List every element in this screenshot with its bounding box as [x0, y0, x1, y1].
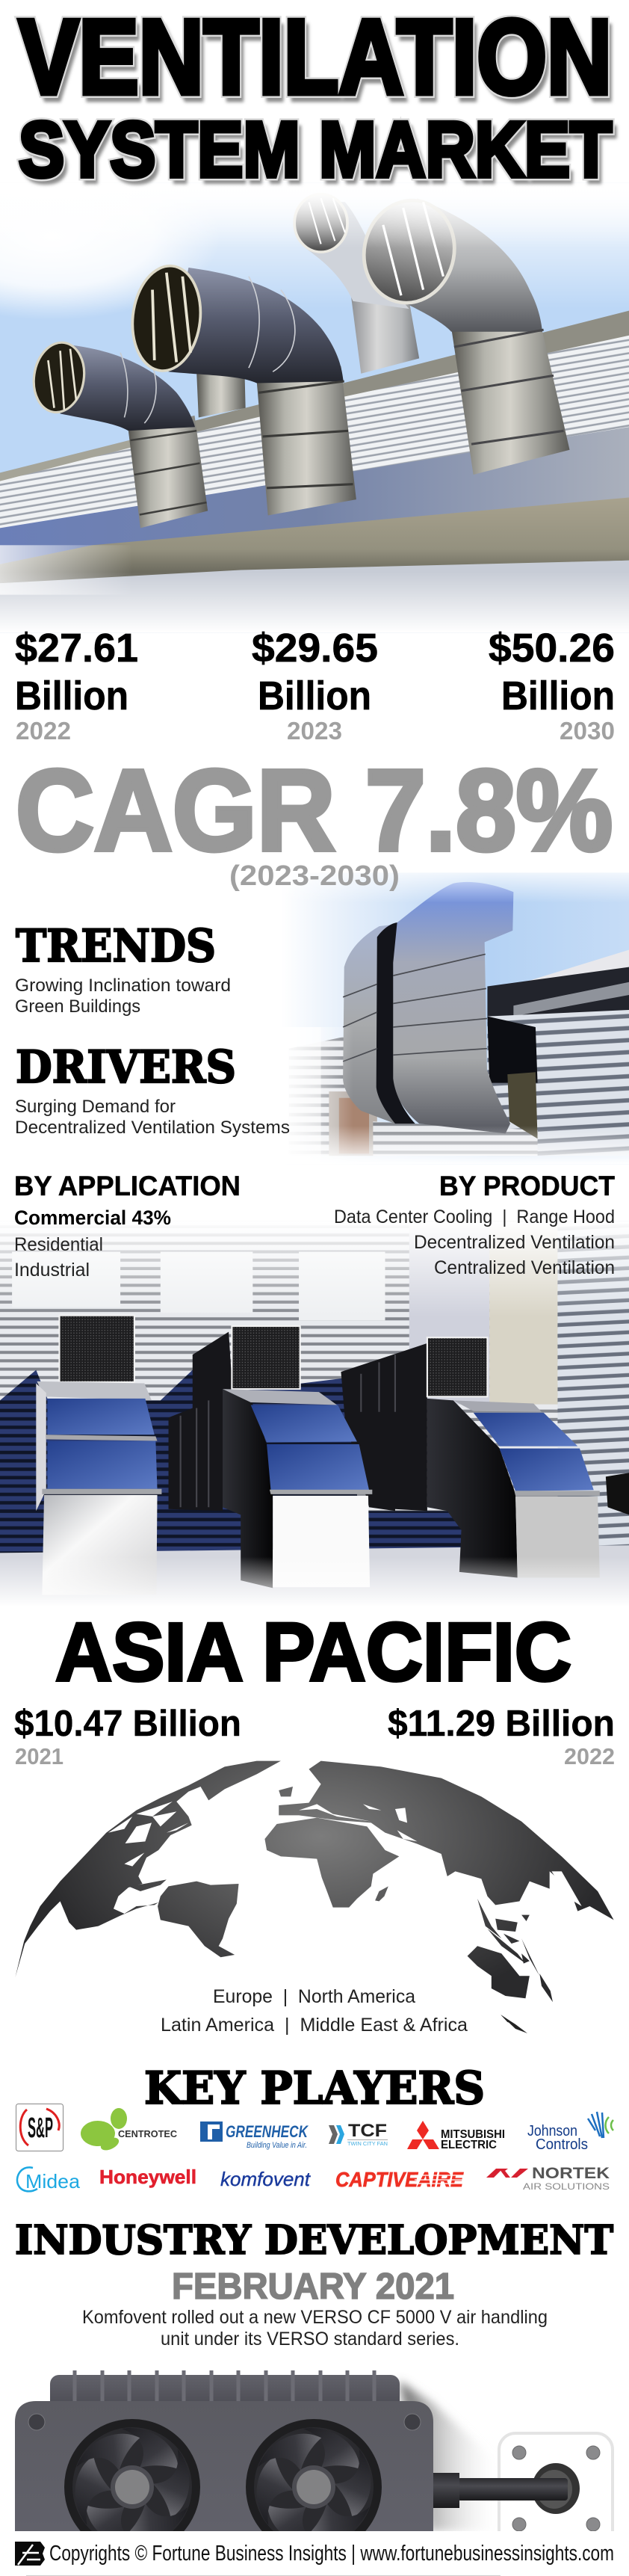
logo: Centrotec: CENTROTEC: [118, 2128, 178, 2139]
logo: TCF: TWIN CITY FAN: [347, 2142, 388, 2147]
logo: Johnson Controls: [527, 2112, 613, 2153]
duct: pale rear: [196, 194, 419, 417]
segment: by product: BY PRODUCT: [439, 1171, 615, 1201]
stat: 2022 market size: [15, 626, 138, 745]
map: Southeast Asia islands: [477, 1899, 553, 2002]
duct: middle large: [127, 262, 356, 516]
trends text: [15, 976, 231, 1017]
stat: 2023 market size: [252, 626, 378, 745]
logo: Greenheck: Building Value in Air.: [247, 2141, 307, 2150]
map: South America: [158, 1882, 239, 1957]
illustration: air handling unit with fans: [15, 2370, 614, 2531]
stat: 2030 market size: 2030: [560, 717, 615, 745]
logo: Johnson Controls: Johnson: [527, 2123, 577, 2139]
logo: Greenheck: GREENHECK: [226, 2122, 309, 2141]
fan left: [64, 2419, 200, 2531]
key players heading: KEY PLAYERS: [144, 2062, 485, 2115]
map: Eurasia: [279, 1761, 614, 1920]
unit shadow: [398, 2377, 478, 2531]
mounting plate: [498, 2432, 614, 2531]
logo: Mitsubishi Electric: MITSUBISHI: [441, 2128, 505, 2141]
stat: 2023 market size: Billion: [258, 674, 371, 718]
logo: Centrotec: [81, 2108, 178, 2153]
logo: TCF: [329, 2121, 388, 2147]
segment: by application: Residential: [14, 1234, 103, 1255]
stat: 2021 region value: $10.47 Billion: [14, 1704, 241, 1744]
region heading: ASIA PACIFIC: [55, 1606, 571, 1698]
duct: small left: [29, 339, 208, 528]
connecting pipe: [433, 2473, 568, 2508]
map: Australia: [468, 1946, 530, 1998]
logo: S&P: [16, 2104, 63, 2151]
other regions list: [161, 1986, 468, 2036]
grille: three mesh panels: [59, 1316, 487, 1396]
development description: [82, 2307, 548, 2349]
stat: 2022 region value: [388, 1704, 615, 1769]
body screws: [28, 2414, 421, 2430]
segment: by application: BY APPLICATION: [14, 1171, 241, 1201]
cooling fins: [50, 2370, 400, 2412]
world map globe: [15, 1761, 614, 2024]
logo: Honeywell: Honeywell: [99, 2166, 196, 2188]
logo: CaptiveAire: CAPTIVEAIRE: [335, 2168, 464, 2191]
segment: by application: Industrial: [14, 1260, 90, 1281]
segment: by product: Data Center Cooling | Range Hood: [334, 1207, 615, 1227]
other regions list: Europe | North America: [213, 1986, 415, 2007]
stat: 2021 region value: 2021: [15, 1743, 63, 1769]
stat: 2022 market size: Billion: [15, 674, 128, 718]
other regions list: Latin America | Middle East & Africa: [161, 2015, 468, 2036]
map: New Zealand: [501, 2015, 527, 2033]
trends text: Green Buildings: [15, 996, 140, 1017]
logo: Johnson Controls: Controls: [536, 2136, 588, 2153]
unit: left: [36, 1381, 161, 1595]
stat: 2022 market size: 2022: [16, 717, 71, 745]
stat: 2022 market size: $27.61: [15, 626, 138, 671]
logo: Mitsubishi Electric: ELECTRIC: [441, 2139, 497, 2151]
segment: by application: [14, 1171, 241, 1281]
drivers text: Surging Demand for: [15, 1097, 176, 1117]
development date: FEBRUARY 2021: [172, 2267, 454, 2307]
segment: by application: Commercial 43%: [14, 1207, 171, 1229]
trends text: Growing Inclination toward: [15, 976, 231, 996]
CAGR period: (2023-2030): [229, 860, 400, 892]
duct: front section: [393, 882, 513, 1133]
stat: 2022 region value: $11.29 Billion: [388, 1704, 615, 1744]
development description: Komfovent rolled out a new VERSO CF 5000 V air handling: [82, 2307, 548, 2328]
map: North America: [15, 1761, 281, 1977]
trends heading: TRENDS: [16, 920, 216, 973]
development description: unit under its VERSO standard series.: [161, 2329, 459, 2349]
drivers text: Decentralized Ventilation Systems: [15, 1118, 290, 1138]
logo: Midea: Midea: [25, 2170, 81, 2193]
logo: Nortek: NORTEK: [532, 2165, 610, 2182]
duct: right large: [356, 194, 570, 475]
stat: 2023 market size: 2023: [287, 717, 342, 745]
industry development heading: INDUSTRY DEVELOPMENT: [15, 2217, 613, 2264]
footer logo: FB mark: [15, 2542, 45, 2566]
segment: by product: Centralized Ventilation: [434, 1257, 615, 1278]
duct: rear section: [343, 924, 397, 1124]
image: air handling units: [0, 1221, 629, 1607]
unit body: [15, 2401, 433, 2531]
stat: 2030 market size: $50.26: [489, 626, 615, 671]
logo: Nortek: [486, 2165, 610, 2192]
logo: komfovent: komfovent: [220, 2168, 312, 2190]
title: [19, 0, 616, 199]
drivers heading: DRIVERS: [16, 1041, 236, 1094]
unit: centre: [223, 1389, 372, 1588]
unit: right: [427, 1399, 600, 1578]
map: Africa: [264, 1818, 399, 1908]
segment: by product: [334, 1171, 615, 1278]
stat: 2023 market size: $29.65: [252, 626, 378, 671]
logo: Greenheck: [200, 2121, 309, 2150]
image: rooftop ventilation ducts: [0, 152, 629, 633]
logo: TCF: TCF: [348, 2121, 387, 2141]
stat: 2030 market size: Billion: [501, 674, 615, 718]
stat: 2021 region value: [14, 1704, 241, 1769]
unit: black rear ducting: [169, 1332, 427, 1511]
logo: S&P: S&P: [28, 2113, 53, 2144]
image: rectangular duct on building: [281, 864, 629, 1165]
stat: 2022 region value: 2022: [564, 1743, 615, 1769]
logo: Mitsubishi Electric: [407, 2121, 505, 2151]
segment: by product: Decentralized Ventilation: [414, 1232, 615, 1253]
logo: Nortek: AIR SOLUTIONS: [523, 2181, 610, 2192]
fan right: [246, 2419, 382, 2531]
drivers text: [15, 1097, 290, 1138]
stat: 2030 market size: [489, 626, 615, 745]
